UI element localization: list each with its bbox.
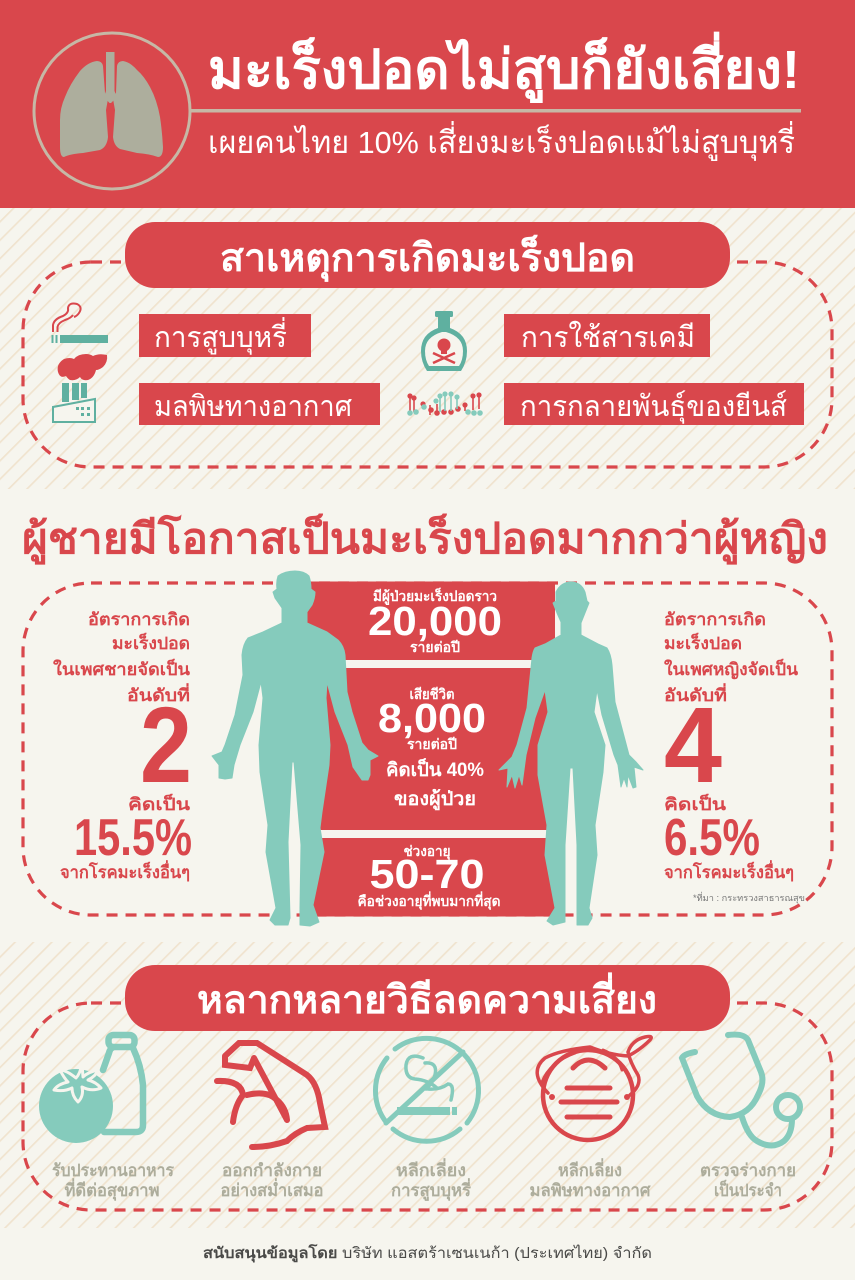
- stat block: patients per year: มีผู้ป่วยมะเร็งปอดราว: [373, 587, 497, 605]
- icon: stethoscope: [682, 1035, 800, 1146]
- stat block: deaths per year: 8,000: [378, 695, 486, 741]
- caption: avoid air pollution: [530, 1158, 652, 1200]
- left text: male rate: คิดเป็น: [128, 792, 190, 814]
- cause label: chemicals: การใช้สารเคมี: [521, 320, 695, 354]
- stat block: age range: ช่วงอายุ: [404, 843, 450, 860]
- subtitle: เผยคนไทย 10% เสี่ยงมะเร็งปอดแม้ไม่สูบบุหรี่: [208, 121, 795, 162]
- caption: avoid smoking: การสูบบุหรี่: [391, 1178, 472, 1202]
- cause label: chemicals: [504, 314, 710, 357]
- caption: healthy food: [52, 1161, 175, 1201]
- left text: male rate: 2: [140, 684, 192, 805]
- left text: male rate: 15.5%: [74, 809, 192, 867]
- left text: male rate: [53, 610, 192, 882]
- icon: cigarette: [52, 304, 108, 343]
- caption: healthy food: ที่ดีต่อสุขภาพ: [64, 1178, 160, 1201]
- caption: regular checkups: [700, 1161, 796, 1200]
- left text: male rate: อันดับที่: [127, 683, 190, 705]
- icon: DNA: [408, 392, 482, 415]
- title: มะเร็งปอดไม่สูบก็ยังเสี่ยง!: [208, 31, 800, 103]
- left text: male rate: ในเพศชายจัดเป็น: [53, 657, 190, 679]
- icon: chemical flask: [421, 311, 467, 371]
- caption: avoid smoking: [391, 1158, 472, 1202]
- stat block: deaths per year: เสียชีวิต: [410, 686, 454, 702]
- cause label: air pollution: [139, 383, 380, 425]
- right text: female rate: อัตราการเกิด: [664, 610, 766, 629]
- caption: regular checkups: เป็นประจำ: [714, 1178, 782, 1200]
- left text: male rate: จากโรคมะเร็งอื่นๆ: [60, 860, 190, 882]
- figure: male body: [212, 571, 378, 926]
- caption: avoid smoking: หลีกเลี่ยง: [396, 1158, 466, 1180]
- right text: female rate: อันดับที่: [664, 683, 727, 705]
- panel: ways to reduce risk: [23, 965, 832, 1210]
- footer credit: สนับสนุนข้อมูลโดย บริษัท แอสตร้าเซนเนก้า (ประเทศไทย) จำกัด: [203, 1243, 652, 1263]
- caption: exercise: [220, 1161, 324, 1200]
- right text: female rate: 6.5%: [664, 809, 760, 867]
- cause label: smoking: [139, 314, 311, 357]
- cause label: smoking: การสูบบุหรี่: [154, 317, 287, 355]
- right text: female rate: จากโรคมะเร็งอื่นๆ: [664, 860, 794, 882]
- panel: causes: [23, 222, 832, 467]
- header divider: [190, 109, 801, 112]
- right text: female rate: คิดเป็น: [664, 792, 726, 814]
- caption: exercise: ออกกำลังกาย: [222, 1161, 322, 1180]
- cause label: gene mutation: การกลายพันธุ์ของยีนส์: [520, 390, 787, 424]
- caption: exercise: อย่างสม่ำเสมอ: [220, 1178, 324, 1200]
- caption: healthy food: รับประทานอาหาร: [52, 1161, 175, 1180]
- caption: regular checkups: ตรวจร่างกาย: [700, 1161, 796, 1180]
- stat block: deaths per year: คิดเป็น 40%: [386, 757, 484, 781]
- caption: avoid air pollution: มลพิษทางอากาศ: [530, 1181, 652, 1200]
- icon: lungs in circle: [34, 33, 190, 189]
- panel: gender comparison: [23, 571, 832, 926]
- caption: avoid air pollution: หลีกเลี่ยง: [558, 1158, 622, 1180]
- icon: flexed arm: [217, 1043, 325, 1147]
- stat block: age range: คือช่วงอายุที่พบมากที่สุด: [358, 891, 500, 910]
- left text: male rate: อัตราการเกิด: [88, 610, 190, 629]
- right text: female rate: มะเร็งปอด: [664, 631, 742, 653]
- stat block: age range: 50-70: [370, 851, 484, 897]
- stat block: deaths per year: ของผู้ป่วย: [394, 788, 476, 811]
- figure: female body: [499, 582, 643, 925]
- header band: [0, 0, 855, 208]
- left text: male rate: มะเร็งปอด: [112, 631, 190, 653]
- icon: no smoking: [375, 1038, 479, 1141]
- heading: causes: [125, 222, 730, 288]
- icon: factory: [53, 354, 107, 422]
- stat block: patients per year: 20,000: [368, 598, 502, 644]
- icon: face mask: [537, 1036, 651, 1140]
- heading: reduce risk: [125, 965, 730, 1031]
- right text: female rate: ในเพศหญิงจัดเป็น: [664, 657, 798, 680]
- right text: female rate: [664, 610, 798, 882]
- stat block: deaths per year: [305, 668, 555, 830]
- heading: reduce risk: หลากหลายวิธีลดความเสี่ยง: [197, 972, 657, 1022]
- right text: female rate: 4: [664, 684, 722, 805]
- stat block: patients per year: [305, 582, 555, 660]
- heading: causes: สาเหตุการเกิดมะเร็งปอด: [220, 234, 635, 282]
- icon: tomato and bottle: [39, 1035, 143, 1143]
- stat block: age range: [305, 838, 555, 916]
- stat block: patients per year: รายต่อปี: [410, 639, 460, 655]
- source note: *ที่มา : กระทรวงสาธารณสุข: [693, 891, 805, 904]
- cause label: air pollution: มลพิษทางอากาศ: [154, 391, 353, 423]
- heading: men at higher risk: ผู้ชายมีโอกาสเป็นมะเร็งปอดมากกว่าผู้หญิง: [22, 513, 828, 565]
- stat block: deaths per year: รายต่อปี: [407, 736, 457, 752]
